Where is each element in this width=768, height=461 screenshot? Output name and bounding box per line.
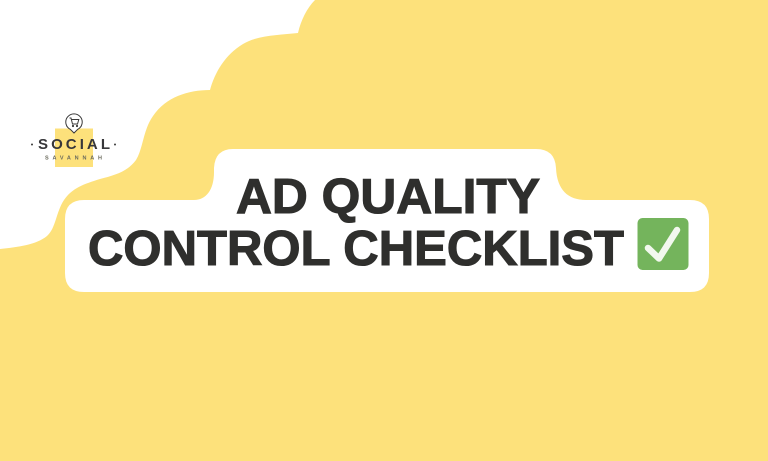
icon: shopping cart pin [66,114,82,133]
title line 1: AD QUALITY [236,170,540,224]
logo wordmark: SOCIAL [38,136,110,153]
title line 2: CONTROL CHECKLIST [88,222,624,276]
icon: green check mark [638,218,688,270]
logo: Social Savannah [31,114,116,167]
logo subtitle: SAVANNAH [45,156,102,162]
logo backdrop square [55,128,93,167]
logo dots [31,144,116,146]
title [88,170,624,276]
title plate [65,149,709,292]
